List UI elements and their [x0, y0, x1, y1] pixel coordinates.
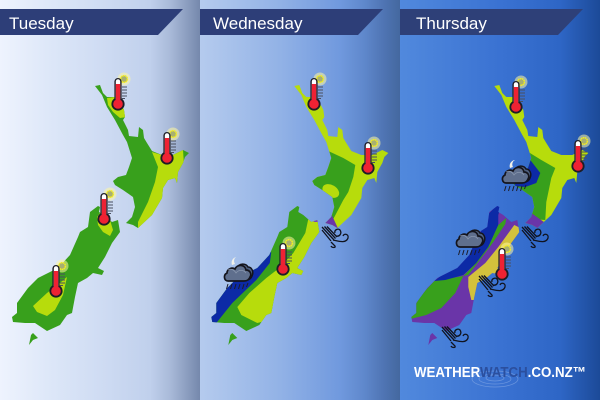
- icon: thermometer East Cape: [571, 134, 590, 173]
- icon: thermometer Northland: [307, 72, 326, 111]
- icon: wind Canterbury: [479, 276, 505, 296]
- icon: thermometer Nelson: [97, 188, 116, 226]
- background: Wednesday: [200, 0, 400, 400]
- heading banner: Wednesday: Wednesday: [213, 14, 303, 33]
- logo: WEATHERWATCH.CO.NZ™: [414, 365, 586, 381]
- icon: wind Cook Strait: [522, 226, 548, 248]
- icon: rain cloud South Island: [456, 230, 485, 255]
- background: Tuesday: [0, 0, 200, 400]
- icon: wind Southland: [442, 326, 468, 348]
- icon: thermometer Canterbury: [495, 242, 514, 281]
- background: Thursday: [400, 0, 600, 400]
- icon: wind: [322, 226, 348, 248]
- icon: thermometer Canterbury: [276, 236, 296, 276]
- icon: moon and rain cloud North Island: [502, 160, 531, 191]
- icon: thermometer Otago: [49, 260, 68, 298]
- heading banner: Thursday: [400, 9, 583, 35]
- panel: Wednesday: [200, 0, 400, 400]
- panel: Thursday: [400, 0, 600, 400]
- heading banner: Tuesday: Tuesday: [9, 14, 74, 33]
- icon: thermometer East Cape: [160, 128, 180, 165]
- map: Wednesday: [204, 85, 388, 345]
- icon: moon and rain cloud: [224, 257, 253, 289]
- map: Tuesday: [12, 85, 189, 345]
- heading banner: Wednesday: [200, 9, 383, 35]
- icon: thermometer East Cape: [361, 136, 380, 175]
- map: Thursday: [404, 85, 588, 345]
- panel: Tuesday: [0, 0, 200, 400]
- icon: thermometer Northland: [111, 72, 130, 111]
- icon: thermometer Northland: [509, 76, 528, 114]
- heading banner: Thursday: Thursday: [416, 14, 487, 33]
- heading banner: Tuesday: [0, 9, 183, 35]
